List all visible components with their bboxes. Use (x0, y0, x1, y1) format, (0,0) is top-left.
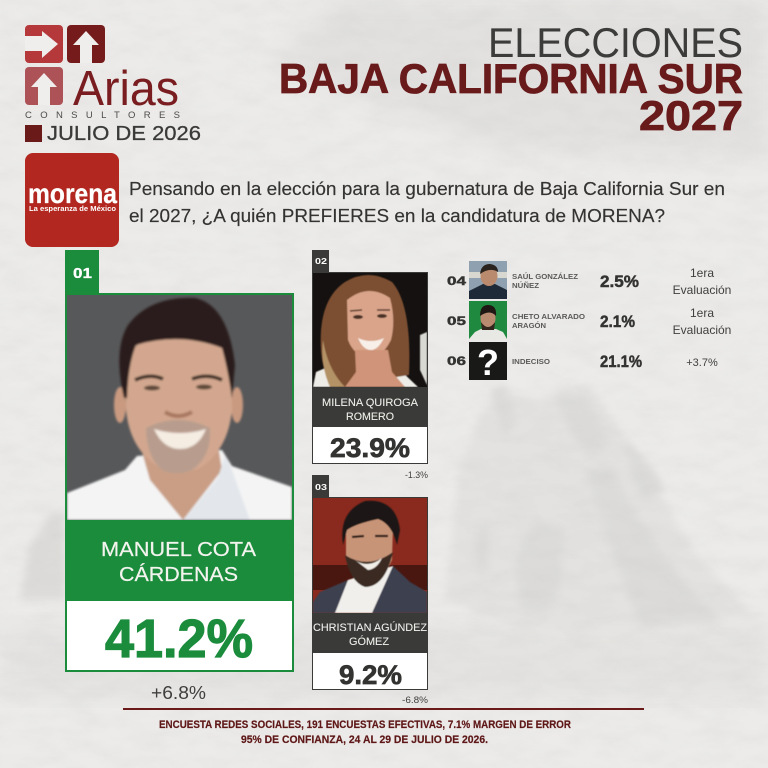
date: Julio de 2026: JULIO DE 2026 (47, 123, 201, 145)
candidate name: MILENA QUIROGA (322, 397, 419, 409)
result 23.9%: 23.9% (330, 433, 410, 463)
rank tab 01 (65, 250, 99, 294)
change +3.7%: +3.7% (686, 357, 718, 369)
footer: methodology: 95% DE CONFIANZA, 24 AL 29 DE JULIO DE 2026. (241, 734, 488, 746)
footer: methodology: ENCUESTA REDES SOCIALES, 191 ENCUESTAS EFECTIVAS, 7.1% MARGEN DE ERROR (159, 719, 571, 731)
name: SAÚL GONZÁLEZ (512, 272, 579, 281)
candidate name (101, 539, 257, 586)
row: candidate 05 Cheto Alvarado Aragón: 05 (447, 316, 467, 328)
row: candidate 04 Saúl González Núñez: 04 (447, 276, 467, 288)
footer: methodology (159, 719, 571, 746)
change note: Evaluación (673, 323, 731, 337)
change -6.8%: -6.8% (402, 695, 428, 705)
question text (129, 179, 725, 226)
photo: Milena Quiroga (313, 273, 427, 387)
candidate name: CHRISTIAN AGÚNDEZ (313, 621, 427, 634)
result 2.5%: 2.5% (600, 272, 639, 291)
rank tab 03: 03 (315, 483, 328, 492)
candidate name (322, 397, 419, 423)
result 41.2%: 41.2% (105, 609, 253, 669)
panel: candidate 03 Christian Agúndez Gómez (312, 475, 428, 690)
photo: Cheto Alvarado (469, 301, 507, 339)
question text: Pensando en la elección para la gubernatura de Baja California Sur en (129, 179, 725, 199)
result 9.2%: 9.2% (339, 660, 402, 690)
logo subtitle: CONSULTORES (25, 110, 180, 121)
icon: up arrow tile dark (67, 25, 105, 63)
name (512, 272, 579, 290)
title (279, 19, 743, 139)
candidate name: ROMERO (346, 411, 394, 423)
candidate name: CÁRDENAS (119, 563, 238, 586)
change note: 1era (690, 306, 714, 320)
photo: Saúl González (469, 261, 507, 299)
title: BAJA CALIFORNIA SUR (279, 55, 743, 102)
panel: candidate 01 Manuel Cota Cárdenas (65, 250, 294, 671)
change -1.3%: -1.3% (405, 470, 428, 480)
question text: el 2027, ¿A quién PREFIERES en la candidatura de MORENA? (129, 206, 665, 226)
name: CHETO ALVARADO (512, 314, 586, 321)
photo: Christian Agúndez (313, 498, 427, 613)
icon: right arrow tile (25, 25, 63, 63)
row: candidate 04 Saúl González Núñez (447, 261, 731, 299)
candidate name: MANUEL COTA (101, 539, 257, 561)
title: 2027 (639, 92, 743, 139)
name (512, 314, 586, 330)
change note: Evaluación (673, 283, 731, 297)
result 2.1%: 2.1% (600, 312, 635, 331)
logo: morena: La esperanza de México (29, 204, 116, 213)
title: ELECCIONES (488, 19, 743, 66)
candidate name (313, 621, 427, 648)
icon: question mark: ? (477, 342, 499, 383)
candidate name: GÓMEZ (349, 635, 389, 648)
result 21.1%: 21.1% (600, 352, 642, 371)
row: candidate 05 Cheto Alvarado Aragón (447, 301, 731, 339)
rank tab 01: 01 (73, 265, 92, 282)
icon: up arrow tile light (25, 67, 63, 105)
logo wordmark: Arias (73, 62, 179, 116)
name: INDECISO (512, 359, 551, 366)
change note (673, 266, 731, 297)
logo: Arias Consultores (25, 25, 180, 121)
name: NÚÑEZ (512, 281, 540, 290)
rank tab 02: 02 (315, 257, 328, 266)
photo: Manuel Cota (67, 295, 292, 520)
row: option 06 Indeciso: 06 (447, 356, 466, 368)
rank tab 02 (312, 250, 329, 273)
logo: morena (25, 153, 119, 247)
change note: 1era (690, 266, 714, 280)
icon: question mark (469, 342, 507, 383)
change note (673, 306, 731, 337)
name: ARAGÓN (512, 321, 546, 330)
rank tab 03 (312, 475, 329, 498)
panel: candidate 02 Milena Quiroga Romero (312, 250, 428, 464)
change +6.8%: +6.8% (151, 683, 206, 703)
logo: morena: morena (28, 178, 117, 209)
row: option 06 Indeciso (447, 342, 718, 383)
